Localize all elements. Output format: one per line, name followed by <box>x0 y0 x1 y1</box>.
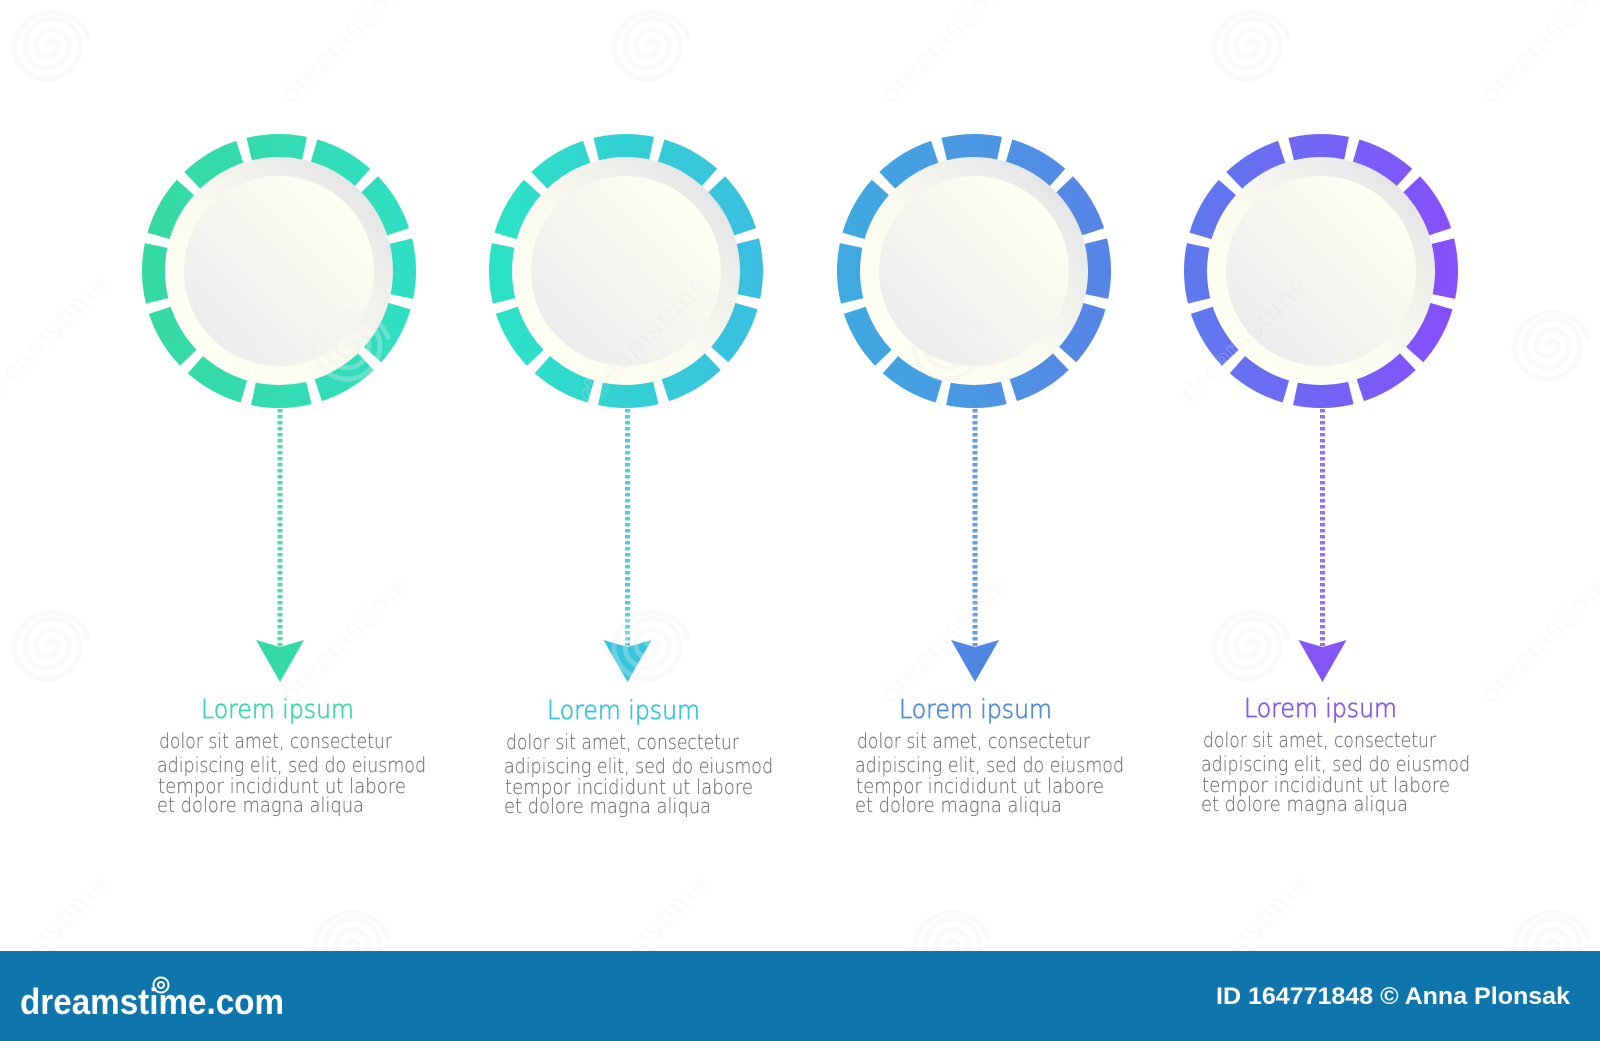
watermark overlay: dreamstime <box>573 269 715 411</box>
dotted connector <box>278 409 282 646</box>
watermark overlay: dreamstime <box>873 569 1015 711</box>
watermark overlay: dreamstime <box>1173 269 1315 411</box>
body text: et dolore magna aliqua <box>504 794 711 818</box>
ring: teal segments <box>501 146 751 396</box>
dotted connector <box>1320 409 1325 646</box>
heading: Lorem ipsum <box>547 696 700 726</box>
body text: adipiscing elit, sed do eiusmod <box>157 753 426 777</box>
disc: outer <box>860 157 1088 385</box>
heading: Lorem ipsum <box>1244 694 1397 724</box>
disc: inner <box>1226 176 1416 366</box>
icon: logo spiral <box>154 978 168 992</box>
column 4: violet <box>1196 146 1470 816</box>
disc: outer <box>165 157 393 385</box>
disc: inner <box>531 176 721 366</box>
disc: inner <box>879 176 1069 366</box>
heading: Lorem ipsum <box>201 695 354 725</box>
body text: tempor incididunt ut labore <box>158 774 406 798</box>
ring: blue segments <box>849 146 1099 396</box>
arrow head <box>604 640 652 682</box>
body text <box>157 729 426 817</box>
column 2: teal <box>501 146 773 818</box>
dotted connector <box>625 409 630 646</box>
body text <box>504 730 773 818</box>
column 3: blue <box>849 146 1124 817</box>
body text: dolor sit amet, consectetur <box>857 729 1091 753</box>
ring: violet segments <box>1196 146 1446 396</box>
arrow head <box>951 640 999 682</box>
body text: et dolore magna aliqua <box>1201 792 1408 816</box>
arrow head <box>256 640 304 682</box>
heading: Lorem ipsum <box>899 695 1052 725</box>
body text: dolor sit amet, consectetur <box>506 730 740 754</box>
column 1: green <box>154 146 426 817</box>
image credit: ID 164771848 © Anna Plonsak <box>1216 983 1571 1010</box>
arrow head <box>1298 640 1346 682</box>
ring: green segments <box>154 146 404 396</box>
body text: adipiscing elit, sed do eiusmod <box>1201 752 1470 776</box>
watermark overlay: dreamstime <box>273 569 415 711</box>
body text: tempor incididunt ut labore <box>1202 773 1450 797</box>
watermark overlay: dreamstime <box>573 869 715 1011</box>
dotted connector <box>972 409 978 646</box>
body text: tempor incididunt ut labore <box>856 774 1104 798</box>
body text: et dolore magna aliqua <box>157 793 364 817</box>
body text: et dolore magna aliqua <box>855 793 1062 817</box>
disc: outer <box>512 157 740 385</box>
disc: inner <box>184 176 374 366</box>
body text: tempor incididunt ut labore <box>505 775 753 799</box>
body text <box>1201 728 1470 816</box>
body text: dolor sit amet, consectetur <box>1203 728 1437 752</box>
body text: adipiscing elit, sed do eiusmod <box>855 753 1124 777</box>
watermark overlay: dreamstime <box>1173 869 1315 1011</box>
logo text: dreamstime.com <box>20 981 284 1022</box>
footer banner <box>0 951 1600 1041</box>
body text <box>855 729 1124 817</box>
body text: dolor sit amet, consectetur <box>159 729 393 753</box>
disc: outer <box>1207 157 1435 385</box>
body text: adipiscing elit, sed do eiusmod <box>504 754 773 778</box>
